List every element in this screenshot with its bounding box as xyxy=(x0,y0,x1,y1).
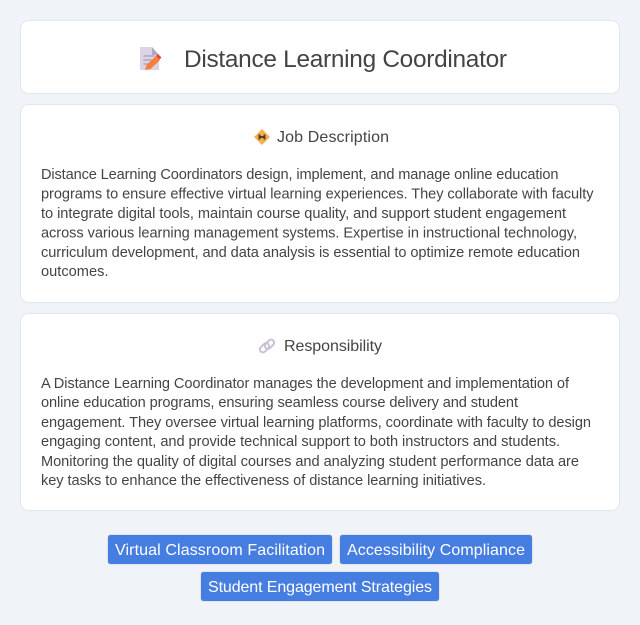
text block: job description: outcomes. xyxy=(41,264,108,280)
text block: job description: across various learning management systems. Expertise in instructional technology, xyxy=(41,226,577,242)
text block: responsibility: A Distance Learning Coordinator manages the development and implementation of xyxy=(41,376,570,392)
heading: job description: Job Description xyxy=(277,129,389,146)
text block: job description: to integrate digital tools, maintain course quality, and support student engagement xyxy=(41,206,566,222)
text block: responsibility: Monitoring the quality of digital courses and analyzing student performance data are xyxy=(41,454,579,470)
text block: job description: curriculum development, and data analysis is essential to optimize remote education xyxy=(41,245,580,261)
panel: job description xyxy=(20,104,620,302)
text block: responsibility xyxy=(41,376,591,489)
text block: responsibility: engaging content, and provide technical support to both instructors and students. xyxy=(41,434,560,450)
tag: virtual classroom facilitation xyxy=(108,534,332,564)
text block: job description: programs to ensure effective virtual learning experiences. They collaborate with faculty xyxy=(41,186,594,202)
text block: responsibility: key tasks to enhance the effectiveness of distance learning initiatives. xyxy=(41,473,486,489)
title text: Distance Learning Coordinator xyxy=(184,46,507,73)
icon: document with pencil xyxy=(140,47,162,70)
heading: responsibility: Responsibility xyxy=(284,338,382,355)
icon: chain link xyxy=(259,338,275,354)
panel: title xyxy=(20,20,620,94)
text block: responsibility: engagement. They oversee virtual learning platforms, coordinate with faculty to design xyxy=(41,415,591,431)
text block: responsibility: online education programs, ensuring seamless course delivery and student xyxy=(41,395,518,411)
text block: job description: Distance Learning Coordinators design, implement, and manage online education xyxy=(41,167,558,183)
text block: job description xyxy=(41,167,594,280)
tag: accessibility compliance: Accessibility Compliance xyxy=(347,542,525,559)
tag: virtual classroom facilitation: Virtual Classroom Facilitation xyxy=(115,542,325,559)
tag: accessibility compliance xyxy=(340,534,532,564)
panel: responsibility xyxy=(20,314,620,510)
tag: student engagement strategies xyxy=(200,572,440,602)
icon: diamond sign xyxy=(254,129,270,145)
tag: student engagement strategies: Student Engagement Strategies xyxy=(208,579,432,596)
